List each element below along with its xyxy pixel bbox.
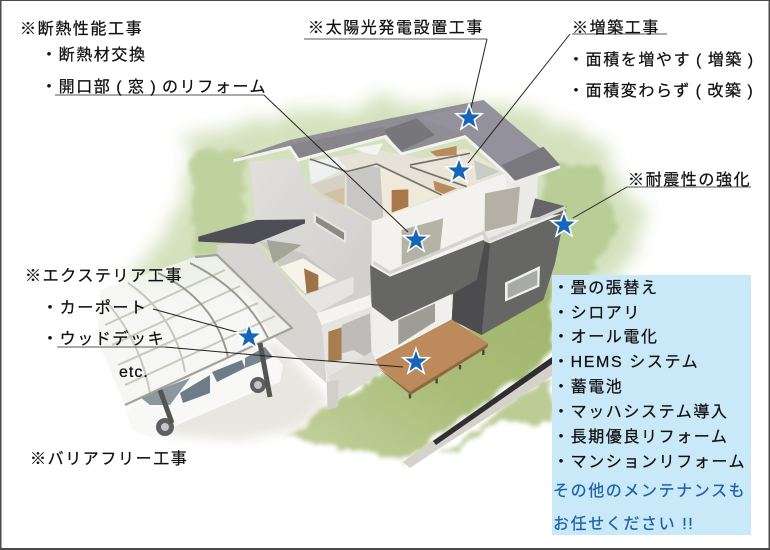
- info list: ・マンションリフォーム: [553, 454, 746, 471]
- ground: driveway: [130, 340, 330, 440]
- entrance path: [328, 352, 382, 402]
- gate post: [327, 380, 338, 410]
- car: [127, 347, 283, 438]
- garden fence: [433, 357, 552, 445]
- balcony rail: [373, 207, 566, 273]
- info list: ・シロアリ: [553, 305, 641, 322]
- small side window: [313, 212, 347, 244]
- garden wall: [403, 362, 552, 468]
- leader lines: [55, 34, 751, 367]
- stars: [236, 104, 577, 373]
- info box: [552, 275, 751, 535]
- info list: ・オール電化: [553, 328, 659, 346]
- background greenery: [130, 100, 640, 310]
- heading: extension: ※増築工事: [572, 19, 660, 37]
- carport posts: [160, 343, 270, 423]
- heading: insulation: [20, 20, 267, 96]
- heading: insulation: ・開口部 ( 窓 ) のリフォーム: [41, 78, 267, 96]
- heading: exterior: etc.: [119, 364, 149, 381]
- info list: ・HEMS システム: [553, 354, 699, 371]
- heading: extension: [568, 19, 755, 100]
- carport and car: [97, 255, 292, 438]
- info list: [553, 279, 746, 533]
- heading: extension: ・面積変わらず ( 改築 ): [568, 82, 754, 100]
- balcony window: [402, 218, 443, 265]
- balcony terrace: [530, 198, 567, 218]
- heading: insulation: ※断熱性能工事: [20, 20, 143, 38]
- heading: extension: ・面積を増やす ( 増築 ): [568, 51, 755, 69]
- info list: その他のメンテナンスも: [553, 482, 746, 500]
- sliding door: [398, 303, 435, 345]
- main roof: [233, 100, 560, 183]
- ground floor wall: [372, 294, 452, 360]
- upper window: [485, 187, 520, 232]
- carport roof: [97, 255, 292, 405]
- heading: exterior: ※エクステリア工事: [25, 267, 183, 285]
- heading: solar: ※太陽光発電設置工事: [308, 19, 484, 37]
- dark lower wall: [370, 213, 565, 335]
- heading: earthquake: ※耐震性の強化: [628, 171, 751, 189]
- heading: exterior: [25, 267, 183, 381]
- ground: lawn: [287, 280, 552, 462]
- porch and stair wall: [198, 219, 372, 383]
- info list: ・畳の張替え: [553, 279, 659, 297]
- heading: insulation: ・断熱材交換: [41, 46, 147, 64]
- right window: [505, 266, 540, 302]
- heading: exterior: ・ウッドデッキ: [42, 329, 165, 348]
- info list: ・マッハシステム導入: [553, 402, 729, 421]
- left gable wall: [250, 158, 372, 317]
- heading: barrier free: ※バリアフリー工事: [30, 450, 188, 468]
- upper right wall: [483, 173, 565, 245]
- info list: ・長期優良リフォーム: [553, 428, 729, 446]
- heading: exterior: ・カーポート: [42, 299, 148, 317]
- info list: ・蓄電池: [553, 378, 623, 396]
- second floor white wall: [372, 173, 507, 278]
- wood deck: [372, 319, 488, 398]
- upper floor interior: [308, 143, 505, 222]
- house illustration: [198, 100, 567, 410]
- info list: お任せください !!: [553, 515, 694, 533]
